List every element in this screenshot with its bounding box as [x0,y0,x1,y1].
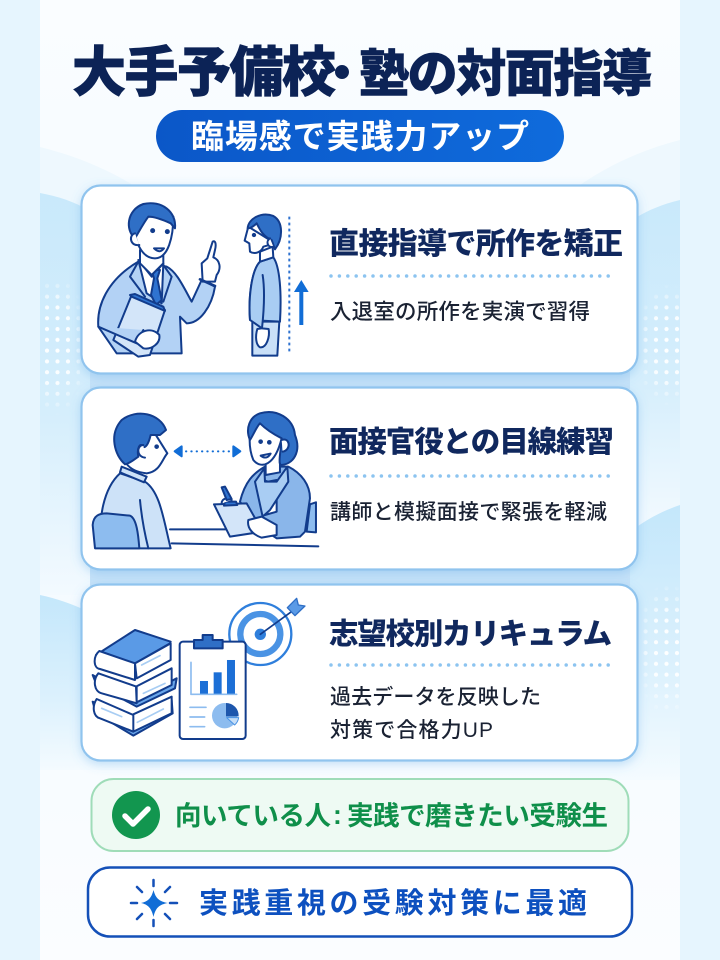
callout: suitable for [92,779,628,851]
divider [331,474,611,478]
icon: sparkle [131,880,177,926]
heading: 直接指導で所作を矯正 [329,228,623,261]
title: 塾の対面指導 [359,46,652,102]
description: 過去データを反映した [330,685,541,709]
callout text: 実践で磨きたい受験生 [347,801,608,831]
illustration: books, clipboard and target [93,598,305,739]
conclusion text: 実践重視の受験対策に最適 [199,887,587,920]
callout text: 向いている人 [175,801,332,831]
title: 大手予備校 [72,43,336,103]
heading: 志望校別カリキュラム [329,618,612,651]
illustration: teacher and student posture [98,203,309,357]
divider [331,663,611,667]
icon: check mark [112,791,160,839]
divider [331,274,611,278]
callout: conclusion [88,868,632,936]
panel: direct coaching [82,186,638,374]
description: 講師と模擬面接で緊張を軽減 [330,501,607,524]
subtitle pill [156,110,564,162]
title [72,43,652,103]
illustration: mock interview [93,412,318,548]
description: 入退室の所作を実演で習得 [330,300,590,324]
heading: 面接官役との目線練習 [329,426,614,459]
panel: eye contact [82,388,638,570]
callout text: : [333,800,342,830]
callout text [175,800,608,831]
description: 対策で合格力UP [330,719,493,742]
subtitle pill: 臨場感で実践力アップ [191,118,529,155]
title: ・ [317,46,367,102]
panel: school-specific curriculum [82,584,638,760]
